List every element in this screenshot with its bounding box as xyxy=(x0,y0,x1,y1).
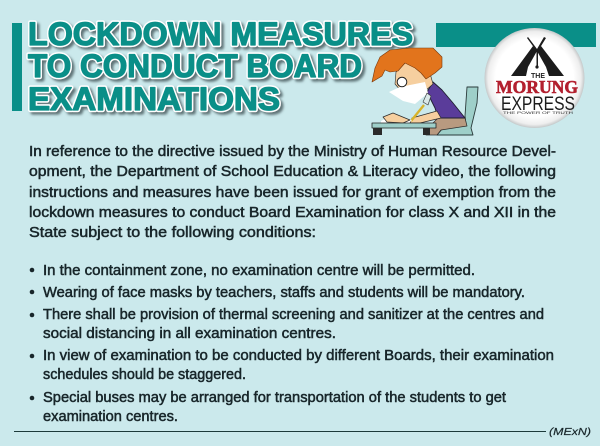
logo text xyxy=(496,73,578,115)
logo text: THE POWER OF TRUTH xyxy=(503,111,574,115)
desk xyxy=(372,123,436,128)
mask xyxy=(389,82,428,104)
face xyxy=(395,62,433,92)
footer rule xyxy=(14,431,546,432)
logo icon: crossed spears tent xyxy=(511,37,564,76)
title: EXAMINATIONS xyxy=(28,81,280,117)
title: TO CONDUCT BOARD xyxy=(28,48,362,84)
intro paragraph: opment, the Department of School Education & Literacy video, the following xyxy=(29,164,556,180)
bullet 1: In the containment zone, no examination centre will be permitted. xyxy=(43,263,475,279)
intro paragraph: State subject to the following conditions: xyxy=(29,225,316,241)
bullet 3: There shall be provision of thermal screening and sanitizer at the centres and xyxy=(43,307,544,323)
logo text: MORUNG xyxy=(496,77,578,97)
intro paragraph: lockdown measures to conduct Board Examination for class X and XII in the xyxy=(29,205,556,221)
logo text: THE xyxy=(531,73,545,80)
bullet 5 xyxy=(30,390,506,425)
bullet 3 xyxy=(30,307,544,342)
bullet 4: schedules should be staggered. xyxy=(43,367,246,383)
title: EXAMINATIONS xyxy=(28,81,280,117)
title: LOCKDOWN MEASURES xyxy=(28,16,413,52)
hair xyxy=(372,48,442,82)
credit: (MExN) xyxy=(549,426,591,438)
intro paragraph: instructions and measures have been issued for grant of exemption from the xyxy=(29,185,556,201)
glasses xyxy=(397,77,407,87)
pencil xyxy=(411,105,424,121)
bullet 2: Wearing of face masks by teachers, staffs and students will be mandatory. xyxy=(43,285,525,301)
raised wrist and arm xyxy=(423,93,431,105)
bullet 4: In view of examination to be conducted by different Boards, their examination xyxy=(43,348,554,364)
chair xyxy=(437,87,478,135)
bullet 5: examination centres. xyxy=(43,409,178,425)
intro paragraph: In reference to the directive issued by the Ministry of Human Resource Devel- xyxy=(29,144,556,160)
bullet list xyxy=(30,263,554,425)
trousers xyxy=(426,118,467,135)
bullet 4 xyxy=(30,348,554,383)
logo text: EXPRESS xyxy=(501,93,575,115)
title xyxy=(28,16,413,117)
shirt xyxy=(427,82,465,118)
bullet 3: social distancing in all examination centres. xyxy=(43,326,336,342)
logo: The Morung Express xyxy=(484,28,584,128)
top right accent bar xyxy=(436,23,596,47)
paper and left hand xyxy=(381,116,412,124)
bullet 5: Special buses may be arranged for transportation of the students to get xyxy=(43,390,506,406)
title: LOCKDOWN MEASURES xyxy=(28,16,413,52)
title: TO CONDUCT BOARD xyxy=(28,48,362,84)
illustration: student writing with face mask xyxy=(372,48,478,135)
intro paragraph xyxy=(29,144,556,241)
left accent bar xyxy=(12,23,22,111)
